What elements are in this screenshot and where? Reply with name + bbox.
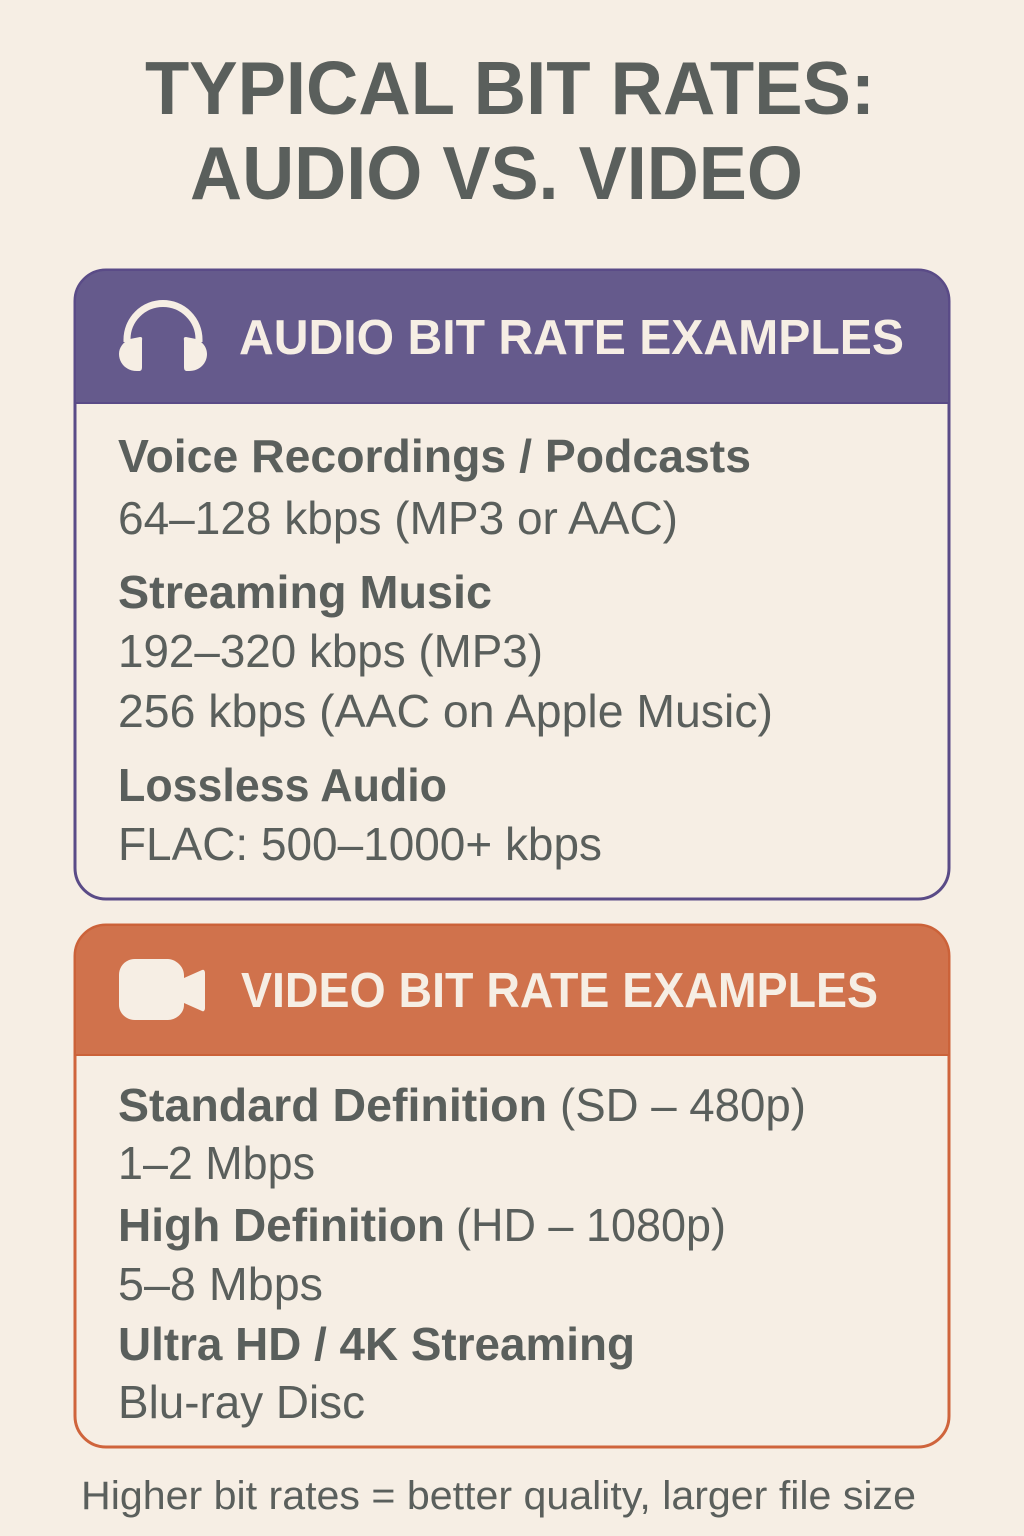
audio panel header [75,270,949,403]
audio item: streaming music: Streaming Music [118,566,492,618]
video item: ultra hd: Blu-ray Disc [118,1376,365,1428]
video item: ultra hd: Ultra HD / 4K Streaming [118,1318,635,1370]
footer note: Higher bit rates = better quality, larger file size [81,1474,916,1518]
icon: headphones [119,304,207,371]
video panel heading: VIDEO BIT RATE EXAMPLES [241,964,878,1018]
title: AUDIO VS. VIDEO [190,131,803,215]
audio panel heading: AUDIO BIT RATE EXAMPLES [239,311,904,365]
audio item: voice recordings: 64–128 kbps (MP3 or AAC) [118,492,678,544]
audio item: lossless audio: Lossless Audio [118,759,447,811]
video item: standard definition [118,1079,806,1189]
video item: standard definition: 1–2 Mbps [118,1137,315,1189]
audio item: streaming music: 256 kbps (AAC on Apple Music) [118,685,773,737]
video item: high definition [118,1199,726,1310]
video panel header [75,925,949,1055]
audio item: voice recordings [118,430,751,544]
video item: high definition: (HD – 1080p) [456,1199,726,1251]
panel: audio bit rate examples [75,270,949,899]
audio item: lossless audio [118,759,602,870]
video item: high definition: High Definition [118,1199,445,1251]
panel: video bit rate examples [75,925,949,1447]
video item: standard definition: (SD – 480p) [560,1079,806,1131]
audio item: streaming music: 192–320 kbps (MP3) [118,625,543,677]
title: TYPICAL BIT RATES: [145,46,875,130]
title [145,46,875,215]
audio item: streaming music [118,566,773,737]
audio item: lossless audio: FLAC: 500–1000+ kbps [118,818,602,870]
video item: standard definition: Standard Definition [118,1079,547,1131]
audio item: voice recordings: Voice Recordings / Podcasts [118,430,751,482]
icon: video camera [119,959,205,1020]
video item: high definition: 5–8 Mbps [118,1258,323,1310]
video item: ultra hd [118,1318,635,1428]
